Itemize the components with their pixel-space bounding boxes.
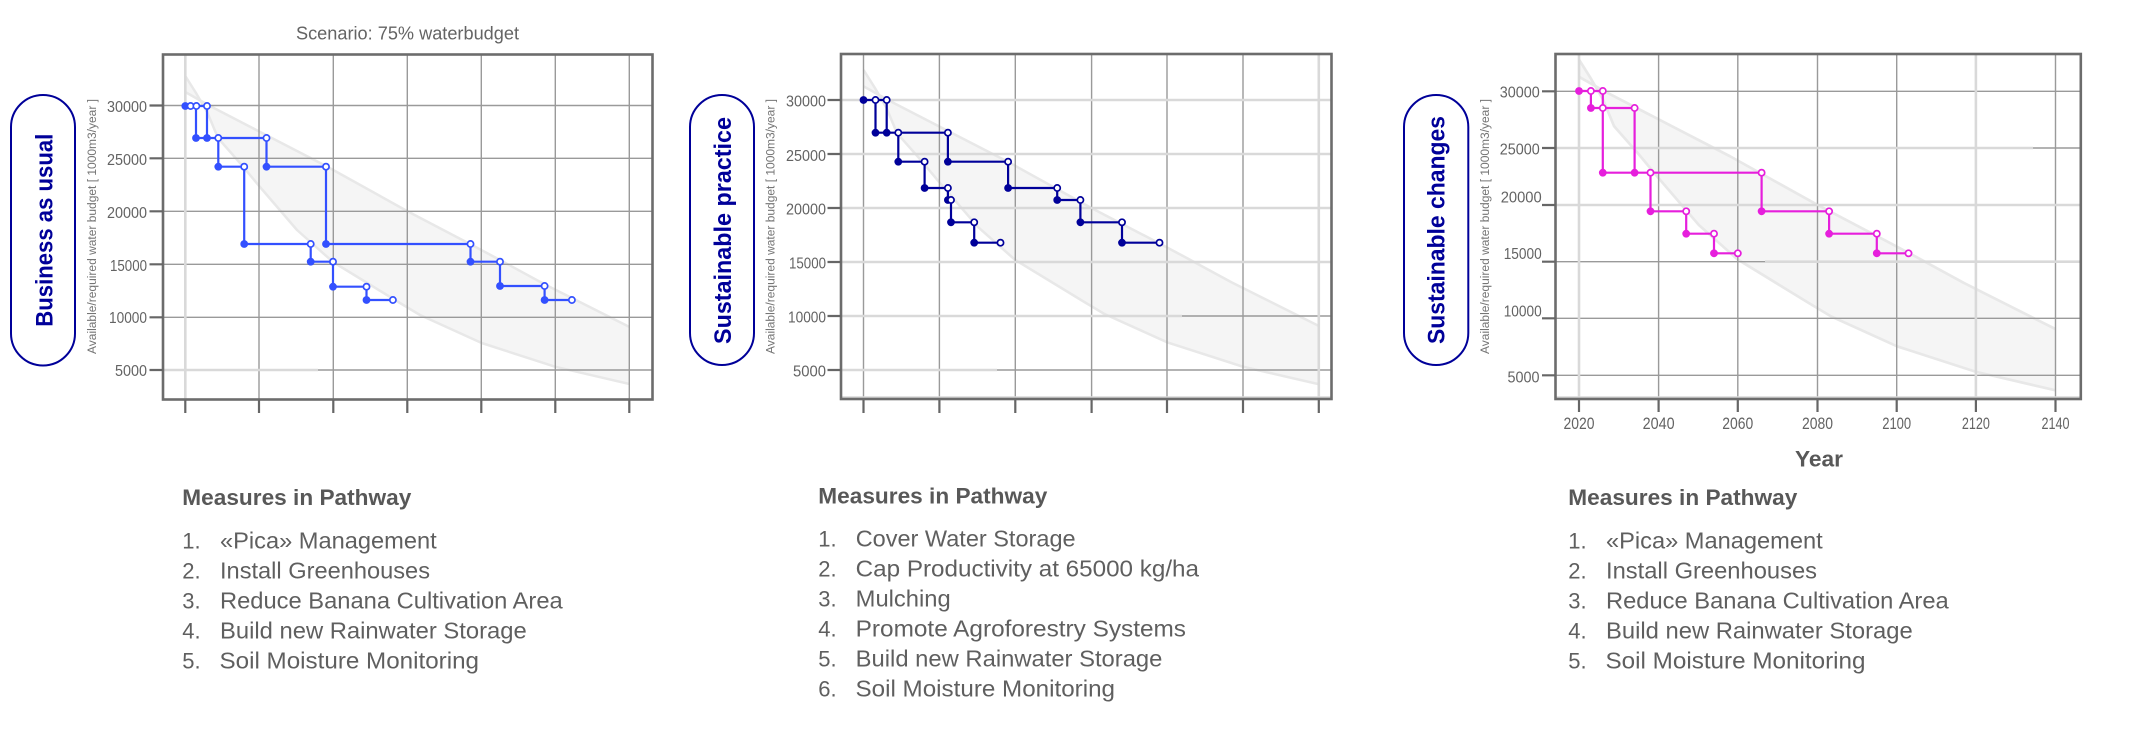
measures list: sustainable practice: Soil Moisture Monitoring [856,676,1115,702]
y axis tick labels: 30000 [107,99,147,116]
measures list: sustainable practice: 5. [818,647,837,672]
measures list: business as usual [182,485,564,673]
x axis title: Year [1795,447,1843,472]
measures list: business as usual: 1. [182,528,201,553]
pill label: sustainable practice: Sustainable practice [710,117,737,344]
measures list: sustainable practice: 1. [818,527,837,552]
y axis tick labels: 10000 [1504,304,1542,320]
measures list: sustainable practice: 2. [818,557,837,582]
measures list: sustainable practice: Cap Productivity at 65000 kg/ha [856,556,1200,582]
measures list: business as usual: 5. [182,648,201,673]
measures list: sustainable changes: 2. [1568,558,1587,583]
y axis tick labels [786,94,826,380]
measures list: business as usual: «Pica» Management [220,527,437,553]
panel: business as usual [11,54,652,673]
measures list: sustainable practice: 3. [818,587,837,612]
y axis tick labels [107,99,147,380]
measures list: sustainable changes: Build new Rainwater Storage [1606,617,1913,643]
measures list: sustainable changes: 3. [1568,588,1587,613]
y axis tick labels: 20000 [1501,190,1542,206]
chart: business as usual pathways [150,54,652,413]
x axis tick labels: 2080 [1802,415,1833,433]
y axis title: Available/required water budget [ 1000m3/year ] [87,99,99,354]
measures list: business as usual: Soil Moisture Monitoring [220,647,479,673]
measures list: sustainable practice: Measures in Pathway [818,483,1048,508]
chart: sustainable changes pathways [1542,54,2081,412]
measures list: sustainable changes: «Pica» Management [1606,527,1823,553]
measures list: sustainable practice [818,483,1200,702]
measures list: sustainable practice: Promote Agroforestry Systems [856,616,1186,642]
pill label: sustainable changes [1404,95,1468,365]
y axis tick labels: 10000 [109,310,147,327]
measures list: sustainable changes [1568,485,1950,673]
measures list: business as usual: 3. [182,588,201,613]
measures list: business as usual: Reduce Banana Cultivation Area [220,587,564,613]
y axis tick labels: 25000 [107,152,147,169]
y axis title: Available/required water budget [ 1000m3/year ] [1480,99,1492,354]
pill label: business as usual [11,95,75,366]
y axis tick labels: 20000 [107,205,147,222]
measures list: sustainable changes: Reduce Banana Cultivation Area [1606,587,1950,613]
y axis tick labels [1500,84,1542,386]
x axis tick labels: 2140 [2042,415,2070,433]
measures list: business as usual: 4. [182,618,201,643]
y axis tick labels: 5000 [1508,370,1540,386]
title: scenario: Scenario: 75% waterbudget [296,24,519,44]
x axis tick labels: 2020 [1564,415,1594,433]
measures list: sustainable practice: 6. [818,677,837,702]
x axis tick labels: 2060 [1722,415,1753,433]
y axis tick labels: 15000 [789,256,826,272]
measures list: sustainable practice: Build new Rainwater Storage [856,646,1162,672]
measures list: sustainable changes: 4. [1568,618,1587,643]
measures list: sustainable changes: 1. [1568,528,1587,553]
chart: sustainable practice pathways [828,54,1332,413]
y axis tick labels: 30000 [786,94,826,110]
x axis tick labels: 2040 [1643,415,1675,433]
y axis tick labels: 15000 [110,258,147,275]
y axis tick labels: 5000 [793,364,826,380]
measures list: sustainable changes: Soil Moisture Monitoring [1606,647,1866,673]
y axis title: Available/required water budget [ 1000m3/year ] [766,99,778,354]
panel: sustainable practice [690,54,1332,702]
measures list: business as usual: 2. [182,558,201,583]
measures list: business as usual: Build new Rainwater Storage [220,617,527,643]
measures list: sustainable changes: 5. [1568,648,1587,673]
x axis tick labels [1564,415,2070,433]
y axis tick labels: 20000 [786,202,826,218]
y axis tick labels: 15000 [1504,246,1542,263]
measures list: business as usual: Install Greenhouses [220,557,430,583]
measures list: sustainable practice: 4. [818,617,837,642]
y axis tick labels: 5000 [115,363,147,380]
measures list: business as usual: Measures in Pathway [182,485,412,510]
panel: sustainable changes [1404,54,2081,673]
pill label: business as usual: Business as usual [32,134,59,327]
measures list: sustainable changes: Install Greenhouses [1606,557,1817,583]
measures list: sustainable practice: Mulching [856,586,951,612]
x axis tick labels: 2120 [1962,415,1990,433]
measures list: sustainable practice: Cover Water Storage [856,526,1076,552]
pill label: sustainable changes: Sustainable changes [1423,116,1450,344]
y axis tick labels: 10000 [788,310,826,326]
y axis tick labels: 25000 [1500,142,1540,158]
y axis tick labels: 30000 [1500,84,1540,102]
pill label: sustainable practice [690,95,754,365]
x axis tick labels: 2100 [1882,415,1911,433]
y axis tick labels: 25000 [786,148,826,165]
measures list: sustainable changes: Measures in Pathway [1568,485,1798,510]
